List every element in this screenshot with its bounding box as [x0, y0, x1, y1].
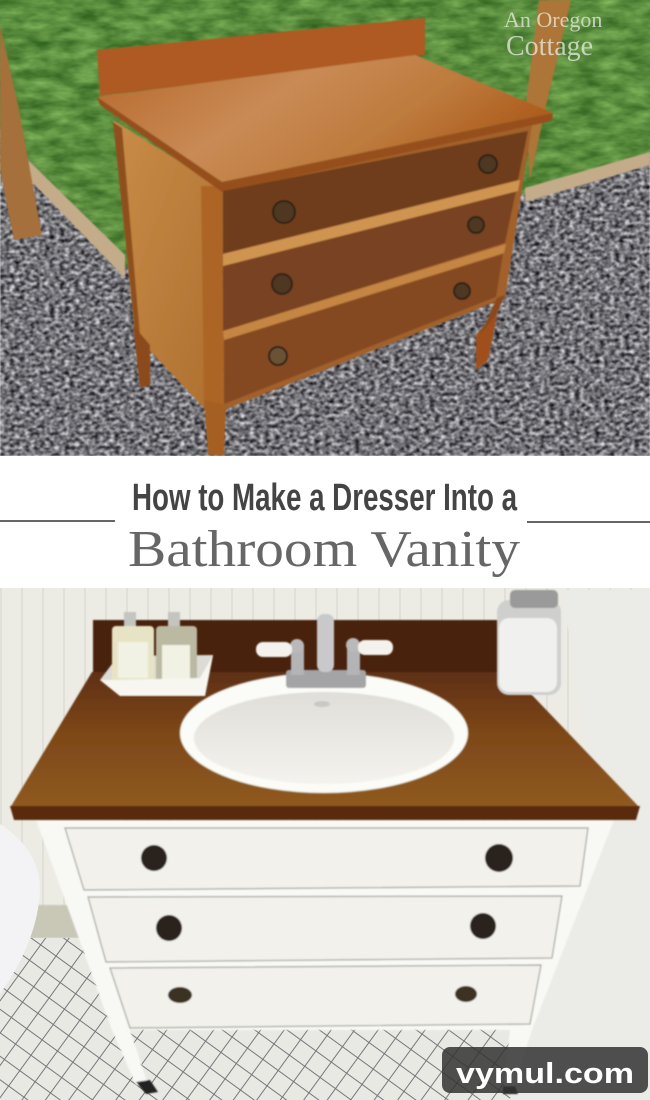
vanity cabinet: [36, 820, 614, 1094]
heading line two: Bathroom Vanity: [128, 521, 520, 578]
panel: after photo: [0, 588, 650, 1100]
watermark badge: vymul.com: [456, 1058, 634, 1090]
grass lawn: [0, 0, 650, 268]
watermark: An Oregon: [504, 7, 602, 32]
panel: title band: [0, 456, 650, 588]
right wall: [512, 590, 650, 1100]
sink basin: [180, 614, 468, 793]
timber edging: [28, 160, 125, 278]
faucet: [256, 614, 393, 688]
tray with bottles: [100, 612, 213, 696]
wooden counter: [10, 620, 640, 820]
wooden posts: [0, 25, 42, 240]
drawer knobs: [273, 201, 295, 223]
bathtub: [0, 824, 40, 994]
baseboard: [0, 905, 90, 938]
drawer knobs: [141, 845, 167, 871]
panel: before photo: [0, 0, 650, 456]
cotton jar: [497, 590, 561, 695]
icon: dresser: [97, 18, 553, 455]
tile floor: [0, 938, 520, 1100]
legs: [133, 325, 150, 388]
watermark badge: [442, 1047, 648, 1093]
heading line one: How to Make a Dresser Into a: [132, 477, 518, 519]
watermark: [504, 7, 602, 62]
watermark: Cottage: [506, 31, 593, 62]
caster wheels: [136, 1080, 158, 1094]
